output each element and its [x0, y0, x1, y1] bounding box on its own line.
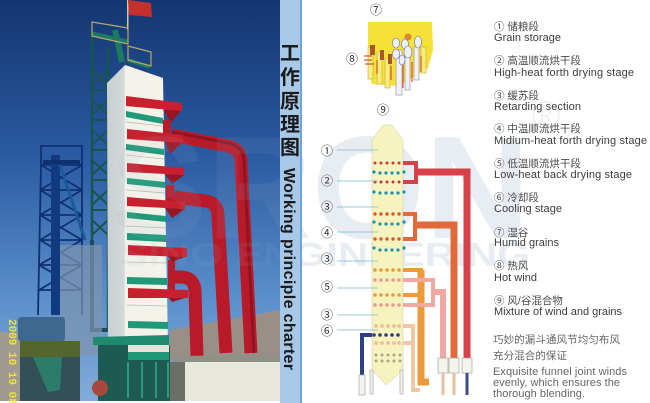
title: Chinese: 作 — [280, 66, 300, 89]
duct: orange low-heat — [403, 270, 429, 382]
background buildings — [0, 310, 280, 401]
callout numbers: ③ — [321, 252, 333, 266]
watermark on diagram — [302, 101, 560, 266]
legend: Retarding section — [494, 101, 581, 113]
watermark on diagram: SINO ENGINEERING — [120, 236, 530, 273]
orange-red dots — [373, 212, 401, 241]
peach dots — [374, 324, 401, 345]
blue machine and green frame — [18, 317, 80, 401]
duct: orange-red medium-heat — [403, 214, 454, 358]
navy dots — [372, 333, 400, 337]
grey bottom rows — [374, 354, 402, 362]
legend: Grain storage — [494, 32, 561, 44]
legend: Hot wind — [494, 272, 537, 284]
icon: humid grain and hot wind detail — [364, 22, 433, 95]
base structure — [92, 335, 170, 401]
legend: ⑧ 热风 — [494, 259, 529, 272]
title: Chinese: 理 — [280, 114, 300, 136]
grain dryer column — [372, 125, 406, 385]
legend: Cooling stage — [494, 203, 562, 215]
blue elevator tower — [38, 146, 85, 315]
callout numbers: ① — [321, 144, 333, 158]
icon: flag — [127, 0, 152, 30]
teal funnels — [372, 170, 406, 252]
watermark on diagram: R — [540, 108, 552, 125]
watermark on photo: SINO ENGINEERING — [120, 236, 530, 273]
title: Chinese: 工 — [280, 43, 300, 65]
red duct risers — [163, 120, 175, 292]
legend: ① 储粮段 — [494, 20, 539, 33]
side title band — [280, 0, 300, 403]
pink dots — [373, 278, 401, 307]
duct: red high-heat — [403, 163, 467, 358]
callout numbers: ⑥ — [321, 324, 333, 338]
large right pipe — [172, 132, 254, 353]
legend: Low-heat back drying stage — [494, 169, 632, 181]
duct: pink low-heat — [403, 280, 443, 358]
callout numbers: ⑧ — [346, 52, 358, 66]
duct: peach cooling — [403, 326, 420, 390]
callout: funnel joint note: thorough blending. — [493, 388, 585, 400]
orange dots — [373, 268, 401, 297]
legend: ② 高温顺流烘干段 — [494, 54, 581, 67]
red heat dots — [374, 162, 400, 184]
legend: ⑥ 冷却段 — [494, 191, 539, 204]
legend: High-heat forth drying stage — [494, 67, 634, 79]
middle pipe — [174, 197, 226, 353]
callout: funnel joint note: 充分混合的保证 — [493, 349, 568, 362]
legend: Midium-heat forth drying stage — [494, 135, 647, 147]
short pipe — [175, 277, 197, 356]
legend — [494, 20, 647, 318]
callout numbers: ⑤ — [321, 280, 333, 294]
legend: ⑨ 风/谷混合物 — [494, 294, 563, 307]
silo — [60, 245, 102, 355]
legend: Mixture of wind and grains — [494, 306, 622, 318]
title: English: Working principle charter — [280, 168, 297, 370]
callout numbers: ⑨ — [377, 103, 389, 117]
callout numbers: ② — [321, 174, 333, 188]
legend: ④ 中温顺流烘干段 — [494, 122, 581, 135]
watermark on photo: SRON — [110, 106, 530, 269]
callout: funnel joint note: 巧妙的漏斗通风节均匀布风 — [493, 333, 620, 346]
callout: funnel joint note — [493, 333, 628, 400]
panel: tower photograph — [0, 0, 280, 403]
red shelves — [126, 96, 188, 302]
callout numbers: ⑦ — [370, 3, 382, 17]
callout numbers: ③ — [321, 200, 333, 214]
low annex building — [170, 354, 280, 401]
legend: Humid grains — [494, 237, 560, 249]
green louvres — [126, 111, 168, 329]
callout: funnel joint note: evenly, which ensures the — [493, 377, 620, 389]
green stair tower — [92, 22, 151, 330]
fans and support legs — [359, 358, 472, 395]
title: Chinese: 原 — [280, 91, 300, 113]
callout numbers: ③ — [321, 308, 333, 322]
watermark on diagram: SRON — [110, 106, 530, 269]
callout leader lines — [337, 150, 378, 330]
callout numbers: ④ — [321, 226, 333, 240]
callout numbers — [321, 3, 389, 338]
legend: ⑦ 湿谷 — [494, 227, 529, 239]
duct: navy cooling — [362, 335, 372, 375]
legend: ③ 缓苏段 — [494, 89, 539, 102]
dryer tower body — [107, 65, 168, 345]
legend: ⑤ 低温顺流烘干段 — [494, 157, 581, 170]
title: Chinese: 图 — [280, 137, 300, 159]
watermark on photo — [125, 136, 280, 266]
callout: funnel joint note: Exquisite funnel joint winds — [493, 366, 628, 378]
